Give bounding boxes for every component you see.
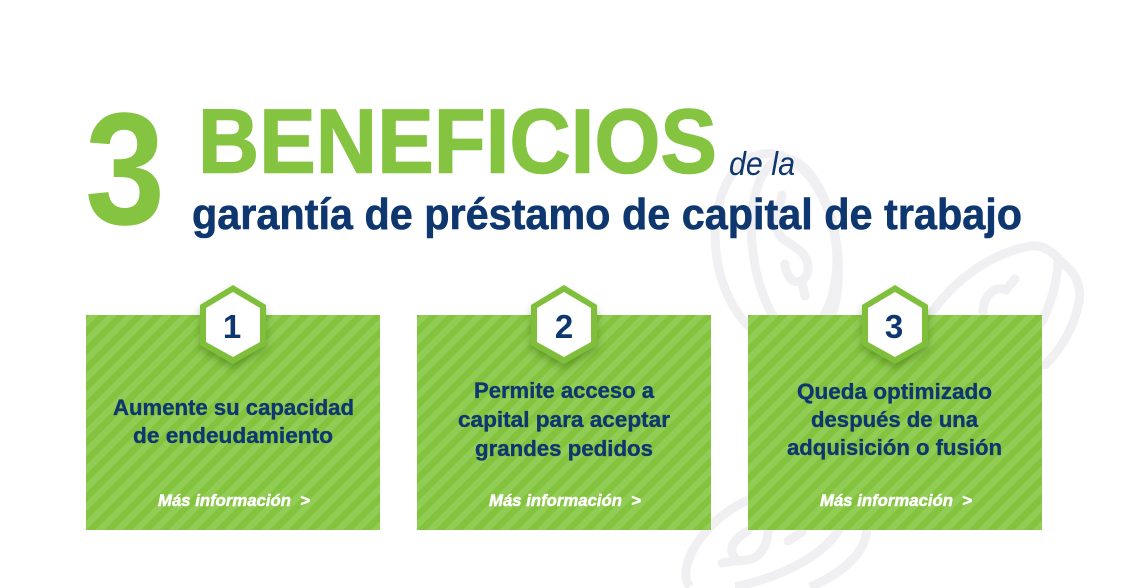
hexagon badge 3 xyxy=(862,285,928,364)
panel: benefit 1 xyxy=(86,285,380,530)
link 3: Más información xyxy=(820,491,953,510)
title: de la: de la xyxy=(729,145,795,182)
benefit text 3: después de una xyxy=(811,407,979,432)
icon: coin top xyxy=(703,146,849,350)
hexagon badge 2 xyxy=(531,285,597,364)
link 2: Más información xyxy=(489,491,622,510)
benefit text 1: de endeudamiento xyxy=(133,423,333,448)
hexagon badge 3: 3 xyxy=(885,308,903,345)
benefit text 3: Queda optimizado xyxy=(797,379,992,404)
panel: benefit 2 xyxy=(417,285,711,530)
link 1: > xyxy=(300,491,310,510)
card background xyxy=(86,315,380,530)
benefit text 2: Permite acceso a xyxy=(474,378,655,403)
icon: coin right xyxy=(930,246,1080,365)
hexagon badge 1 xyxy=(200,285,266,364)
benefit text 1: Aumente su capacidad xyxy=(113,395,354,420)
benefit text 2: grandes pedidos xyxy=(475,436,653,461)
hexagon badge 1: 1 xyxy=(223,308,241,345)
title: BENEFICIOS: BENEFICIOS xyxy=(198,90,717,192)
benefit text 1 xyxy=(113,395,354,448)
panel: benefit 3 xyxy=(748,285,1042,530)
benefit text 3 xyxy=(787,379,1002,460)
benefit text 2: capital para aceptar xyxy=(458,407,670,432)
link 3: > xyxy=(962,491,972,510)
card background xyxy=(417,315,711,530)
benefit text 3: adquisición o fusión xyxy=(787,435,1002,460)
benefit text 2 xyxy=(458,378,670,461)
hexagon badge 2: 2 xyxy=(555,308,573,345)
card background xyxy=(748,315,1042,530)
subtitle: garantía de préstamo de capital de trabajo xyxy=(192,190,1022,239)
big numeral 3: 3 xyxy=(85,79,165,258)
link 1: Más información xyxy=(158,491,291,510)
background coins xyxy=(686,146,1080,587)
icon: coin bottom xyxy=(686,500,867,587)
link 2: > xyxy=(631,491,641,510)
